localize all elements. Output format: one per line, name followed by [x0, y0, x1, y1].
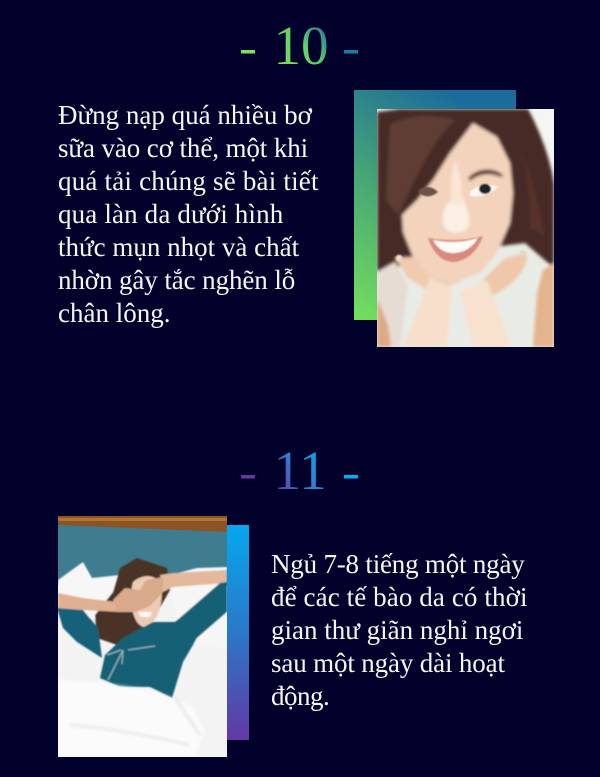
heading: number 10: 10: [274, 15, 328, 76]
text block: advice 11: Ngủ 7-8 tiếng một ngày: [271, 548, 525, 578]
text block: advice 11: sau một ngày dài hoạt: [271, 648, 505, 678]
text block: advice 10: Đừng nạp quá nhiều bơ: [58, 100, 312, 130]
text block: advice 10: quá tải chúng sẽ bài tiết: [58, 166, 319, 196]
text block: advice 11: gian thư giãn nghỉ ngơi: [271, 614, 523, 644]
text block: advice 11: để các tế bào da có thời: [271, 582, 528, 612]
text block: advice 11: [271, 548, 528, 711]
text block: advice 11: động.: [271, 680, 329, 710]
text block: advice 10: [58, 100, 319, 328]
text block: advice 10: sữa vào cơ thể, một khi: [58, 133, 308, 163]
photo: smiling woman: [377, 109, 554, 347]
accent rectangle: blue to purple: [227, 525, 249, 740]
photo: woman waking up in bed: [57, 516, 227, 757]
accent rectangle: green to blue: [354, 90, 516, 320]
heading: number 11: [241, 440, 358, 501]
text block: advice 10: nhờn gây tắc nghẽn lỗ: [58, 265, 295, 295]
heading: number 11: 11: [274, 440, 326, 501]
heading: number 10: [241, 15, 358, 76]
text block: advice 10: thức mụn nhọt và chất: [58, 232, 299, 262]
text block: advice 10: chân lông.: [58, 298, 170, 328]
text block: advice 10: qua làn da dưới hình: [58, 199, 283, 229]
